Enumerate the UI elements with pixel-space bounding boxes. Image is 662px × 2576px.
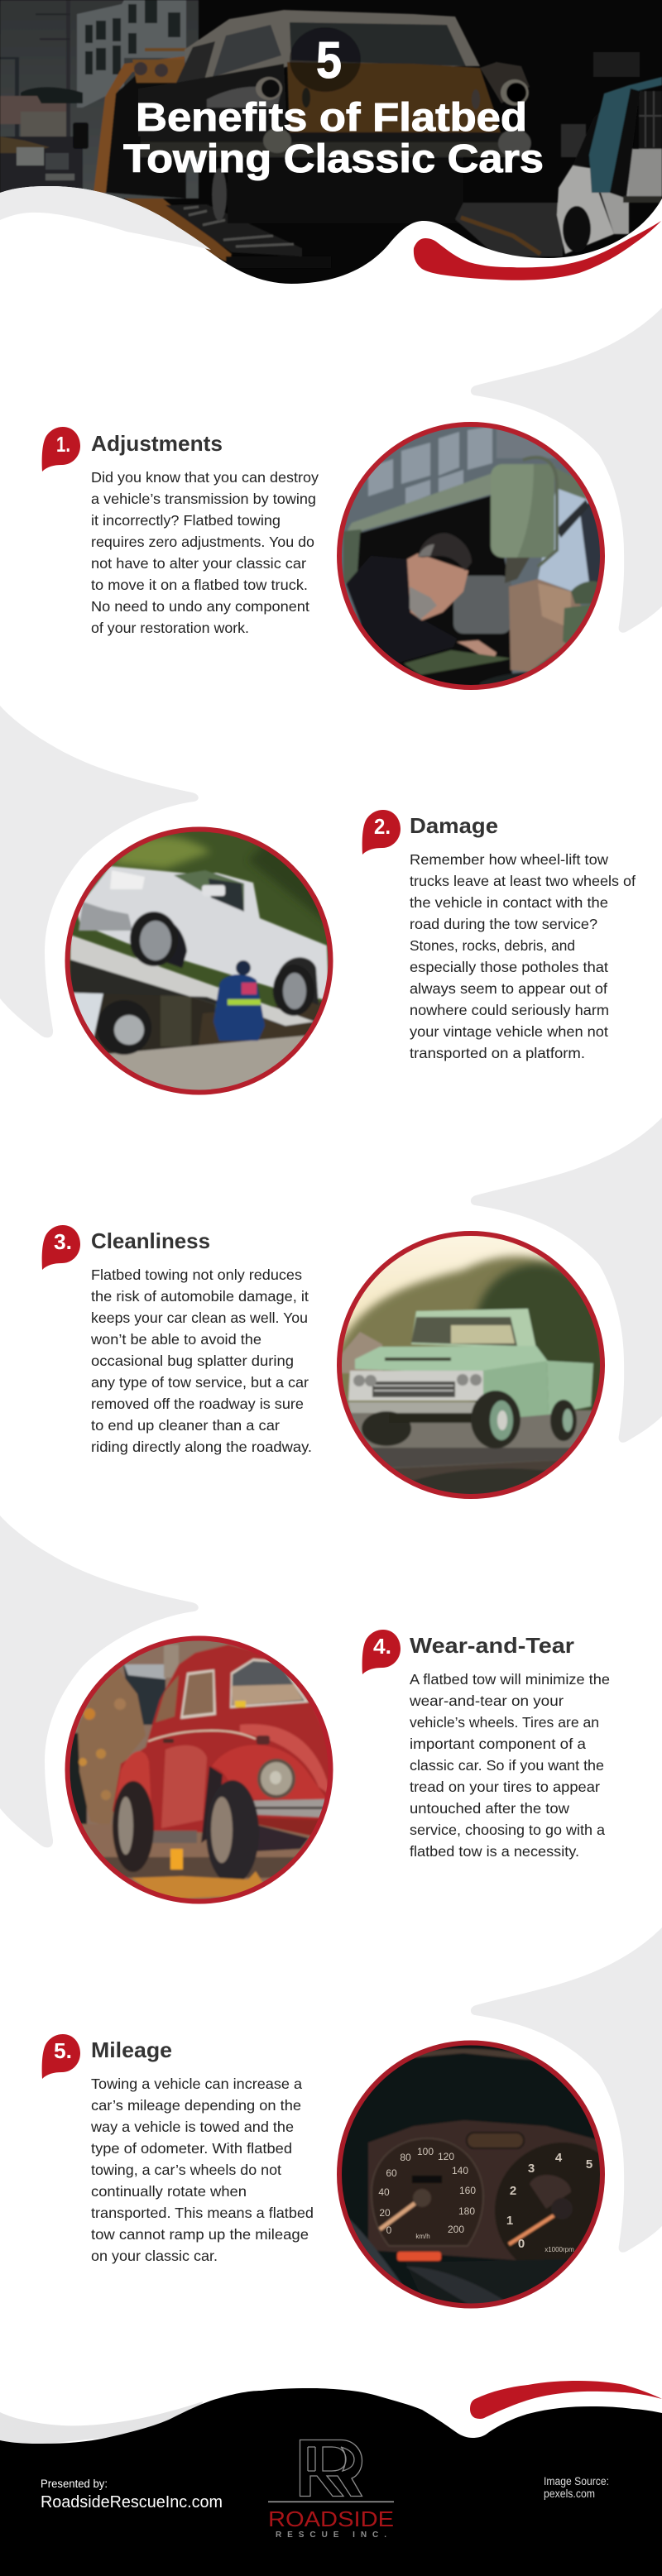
body text 3: removed off the roadway is sure (91, 1396, 304, 1412)
body text 1: it incorrectly? Flatbed towing (91, 512, 281, 529)
gauge numerals: 160 (459, 2185, 476, 2196)
body text 2: trucks leave at least two wheels of (410, 873, 636, 889)
body text 4: classic car. So if you want the (410, 1757, 604, 1774)
body text 4: tread on your tires to appear (410, 1779, 600, 1795)
gauge numerals: 120 (438, 2151, 454, 2162)
footer red swoosh (470, 2381, 662, 2419)
heading 3: Cleanliness (91, 1228, 210, 1253)
body text 4: flatbed tow is a necessity. (410, 1843, 579, 1860)
logo: Roadside Rescue Inc.: ROADSIDE (268, 2507, 394, 2531)
presented by text: RoadsideRescueInc.com (41, 2493, 223, 2511)
badge 2: 2. (374, 814, 391, 839)
gauge numerals: 140 (452, 2165, 468, 2176)
body text 4: untouched after the tow (410, 1800, 569, 1817)
body text 5: continually rotate when (91, 2183, 247, 2200)
body text 3: riding directly along the roadway. (91, 1439, 312, 1455)
photo circle 3: vintage green pickup (331, 1228, 612, 1506)
body text 2: road during the tow service? (410, 916, 597, 932)
badge 3 (42, 1225, 80, 1270)
body text 2: nowhere could seriously harm (410, 1002, 609, 1018)
body text 3: won’t be able to avoid the (90, 1331, 261, 1348)
body text 1: to move it on a flatbed tow truck. (91, 577, 308, 593)
body text 5: way a vehicle is towed and the (90, 2119, 294, 2135)
body text 1: requires zero adjustments. You do (91, 534, 314, 550)
photo circle 5: car dashboard gauges (337, 2040, 605, 2308)
body text 3 (90, 1266, 312, 1455)
body text 5: Towing a vehicle can increase a (91, 2076, 302, 2092)
section 4: Wear-and-Tear (62, 1630, 610, 1911)
background shape: right swoosh 2 (471, 1118, 662, 1443)
body text 4: wear-and-tear on your (409, 1693, 564, 1709)
title (123, 32, 544, 181)
badge 1: 1. (56, 432, 70, 457)
white header wave (0, 186, 662, 298)
footer black band (0, 2388, 662, 2576)
title: Towing Classic Cars (123, 137, 544, 181)
title: Benefits of Flatbed (136, 96, 527, 140)
heading 4: Wear-and-Tear (410, 1633, 574, 1658)
gauge numerals: 80 (400, 2152, 411, 2163)
logo mark (300, 2440, 362, 2497)
gauge numerals: 60 (386, 2167, 397, 2179)
red header swoosh (414, 221, 661, 280)
gauge numerals: 3 (528, 2162, 535, 2176)
body text 4: service, choosing to go with a (410, 1822, 605, 1838)
body text 3: keeps your car clean as well. You (91, 1310, 308, 1326)
gray header wave (0, 186, 211, 250)
gauge numerals: 4 (555, 2151, 563, 2165)
body text 4 (409, 1671, 610, 1860)
background shape: left swoosh 1 (0, 706, 199, 1037)
body text 5: on your classic car. (91, 2248, 218, 2264)
body text 4: vehicle’s wheels. Tires are an (410, 1714, 599, 1731)
section 1: Adjustments (42, 421, 608, 695)
badge 4: 4. (373, 1634, 391, 1659)
heading 1: Adjustments (91, 431, 223, 456)
gauge numerals: 0 (386, 2224, 392, 2236)
body text 2: the vehicle in contact with the (410, 894, 608, 911)
section 5: Mileage (42, 2034, 631, 2316)
logo: Roadside Rescue Inc.: RESCUE INC. (276, 2531, 386, 2540)
badge 3: 3. (54, 1229, 72, 1254)
body text 5: towing, a car’s wheels do not (91, 2162, 281, 2178)
gauge numerals: 100 (417, 2146, 434, 2157)
gauge numerals: 20 (379, 2207, 391, 2219)
body text 2: your vintage vehicle when not (410, 1023, 608, 1040)
body text 3: Flatbed towing not only reduces (91, 1266, 302, 1283)
photo circle 1: man leaning from a military truck (335, 421, 608, 695)
body text 3: any type of tow service, but a car (91, 1374, 309, 1391)
body text 1: of your restoration work. (91, 620, 249, 636)
presented by text (41, 2478, 223, 2511)
body text 2: Stones, rocks, debris, and (410, 937, 575, 954)
heading 2: Damage (410, 813, 498, 838)
badge 2 (362, 810, 401, 855)
body text 2: transported on a platform. (410, 1045, 585, 1061)
heading 5: Mileage (91, 2037, 172, 2062)
body text 2: especially those potholes that (410, 959, 608, 975)
body text 2: always seem to appear out of (410, 980, 607, 997)
footer gray wave (0, 2401, 203, 2449)
gauge numerals: 40 (378, 2186, 390, 2198)
gauge numerals: x1000rpm (544, 2246, 574, 2253)
image source text: pexels.com (544, 2487, 595, 2500)
body text 5 (90, 2076, 314, 2264)
body text 5: car’s mileage depending on the (91, 2097, 301, 2114)
background shape: right swoosh 3 (471, 1927, 662, 2253)
gauge numerals: 1 (506, 2214, 513, 2228)
badge 1 (42, 427, 80, 472)
body text 5: transported. This means a flatbed (91, 2205, 314, 2221)
image source text: Image Source: (544, 2475, 609, 2487)
body text 5: type of odometer. With flatbed (91, 2140, 292, 2157)
gauge numerals: 180 (458, 2205, 475, 2217)
photo circle 4: red classic beetle (62, 1634, 339, 1911)
body text 1: not have to alter your classic car (91, 555, 306, 572)
background shape: left swoosh 2 (0, 1515, 199, 1847)
body text 2: Remember how wheel-lift tow (410, 851, 608, 868)
badge 4 (362, 1630, 401, 1674)
gauge numerals: km/h (415, 2233, 430, 2240)
logo: Roadside Rescue Inc. (268, 2440, 394, 2540)
header photo: flatbed tow truck carrying a classic car (0, 0, 662, 290)
body text 4: A flatbed tow will minimize the (410, 1671, 610, 1688)
photo circle 2: white pickup on a flatbed (62, 823, 339, 1100)
body text 3: the risk of automobile damage, it (91, 1288, 309, 1305)
gauge numerals: 2 (510, 2184, 516, 2198)
body text 3: occasional bug splatter during (91, 1353, 294, 1369)
body text 1 (91, 469, 319, 636)
section 2: Damage (62, 810, 636, 1100)
badge 5 (42, 2034, 80, 2079)
body text 5: tow cannot ramp up the mileage (91, 2226, 309, 2243)
section 3: Cleanliness (42, 1225, 612, 1506)
title: 5 (316, 32, 342, 89)
gauge numerals: 5 (586, 2157, 592, 2171)
background shape: right swoosh 1 (471, 308, 662, 633)
body text 1: Did you know that you can destroy (91, 469, 319, 486)
image source text (544, 2475, 609, 2500)
gauge numerals: 0 (518, 2237, 525, 2251)
body text 4: important component of a (410, 1736, 586, 1752)
body text 1: a vehicle’s transmission by towing (91, 491, 316, 507)
badge 5: 5. (54, 2038, 72, 2063)
gauge numerals (378, 2146, 592, 2253)
presented by text: Presented by: (41, 2478, 108, 2490)
gauge numerals: 200 (448, 2224, 464, 2235)
body text 2 (410, 851, 636, 1061)
body text 3: to end up cleaner than a car (91, 1417, 280, 1434)
body text 1: No need to undo any component (91, 598, 309, 615)
